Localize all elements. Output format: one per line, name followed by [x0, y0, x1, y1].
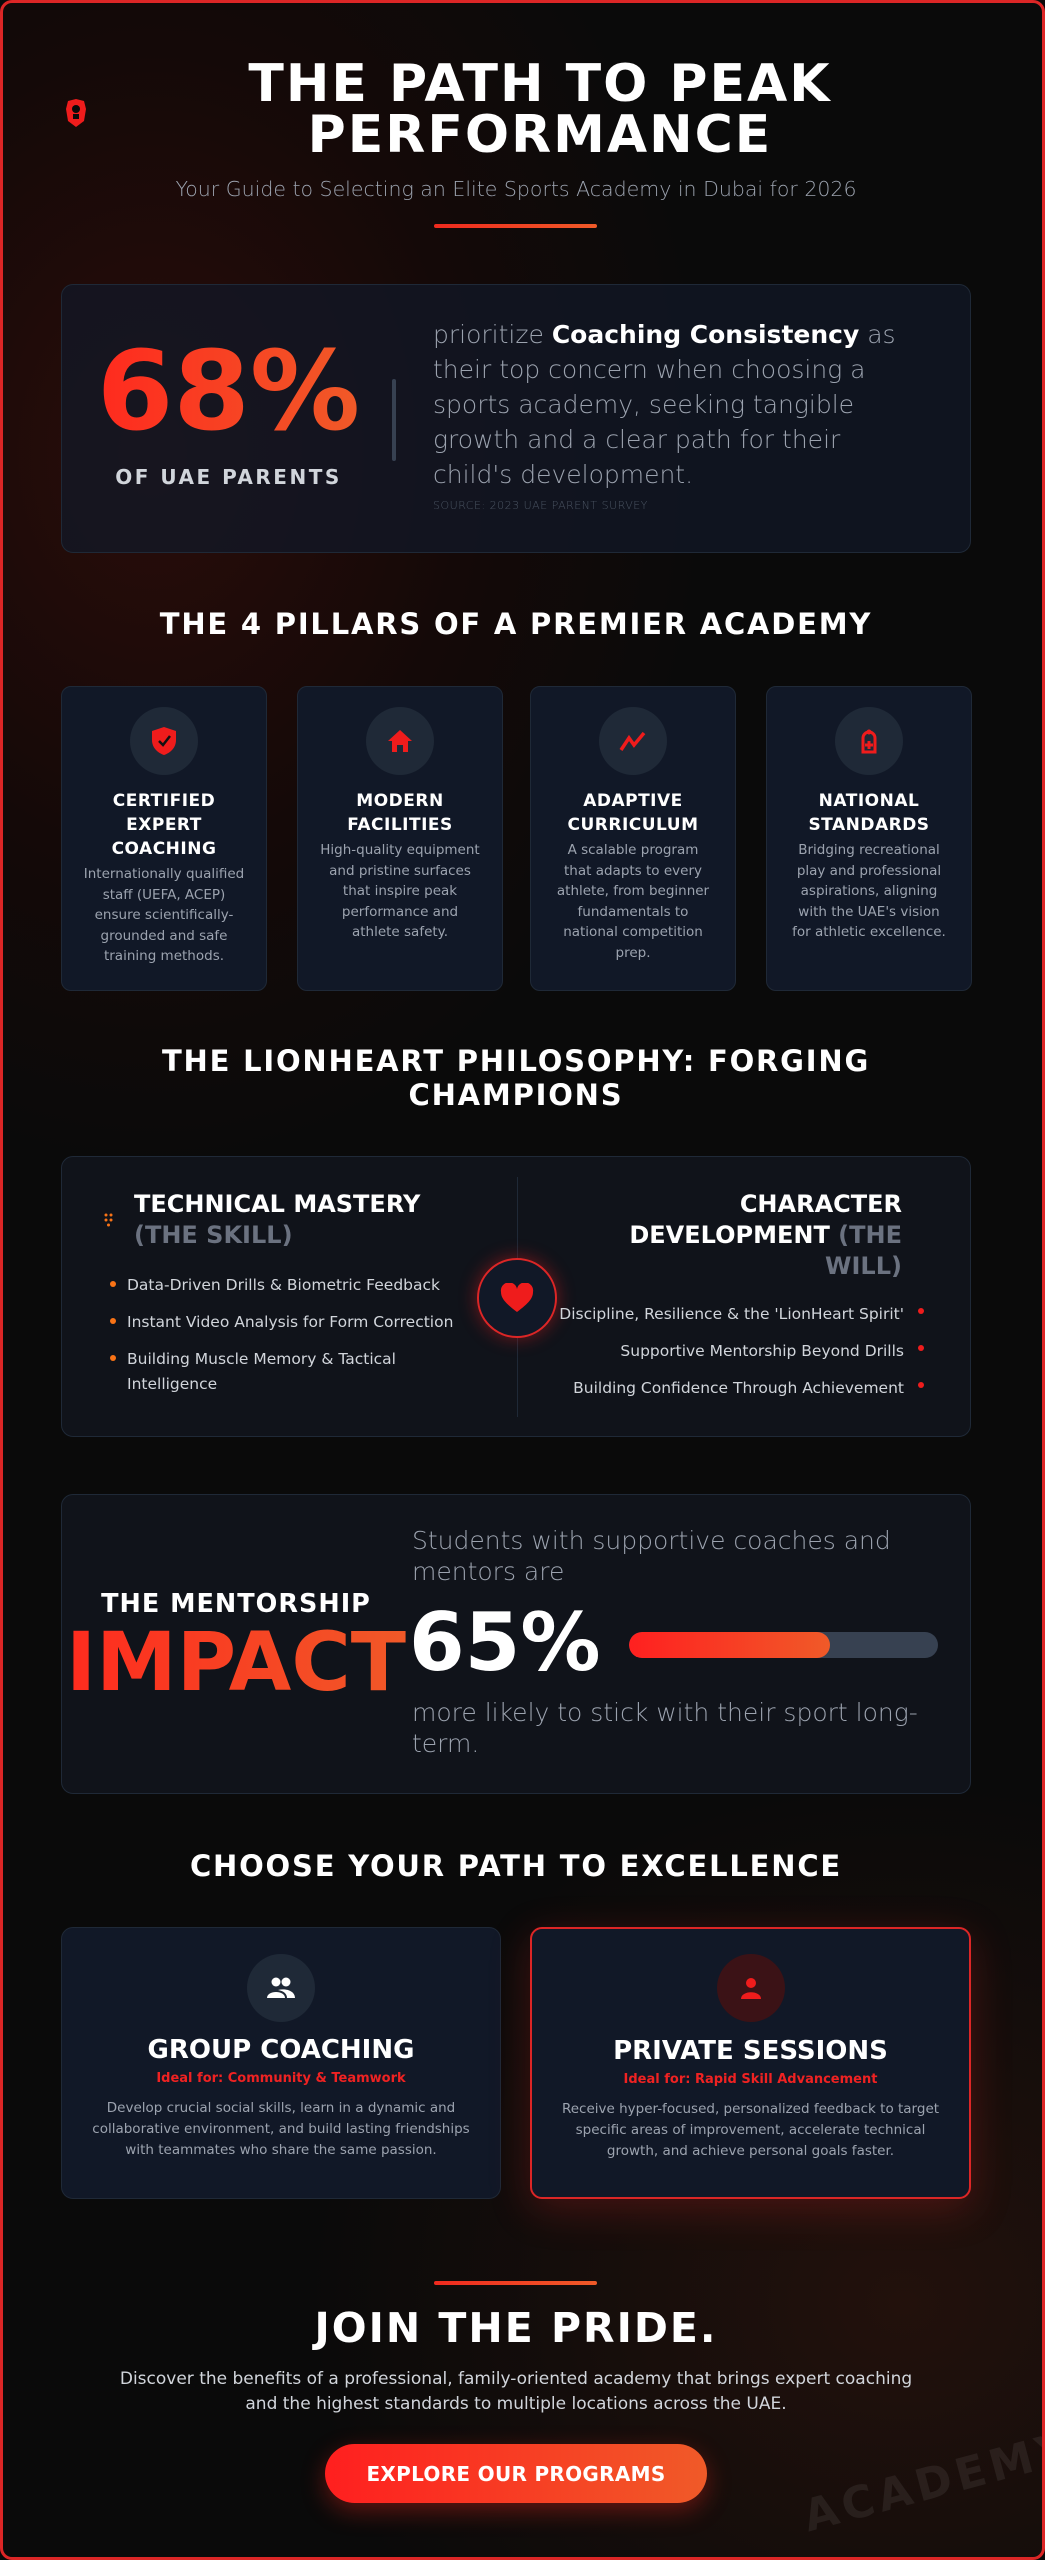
left bullets [110, 1276, 453, 1393]
impact text: Students with supportive coaches and mentors are [412, 1526, 891, 1586]
closing text: Discover the benefits of a professional, family-oriented academy that brings expert coaching and the highest standards to multiple locations across the UAE. [120, 2369, 912, 2414]
pillar: adaptive curriculum [530, 686, 736, 991]
stat 65%: 65% [409, 1596, 600, 1689]
big stat: 68% [97, 327, 360, 455]
pillar: national standards: NATIONAL [819, 791, 919, 811]
logo icon [66, 99, 86, 127]
pillar: certified coaching [61, 686, 267, 991]
subtitle: Your Guide to Selecting an Elite Sports Academy in Dubai for 2026 [175, 177, 857, 201]
card: group coaching [61, 1927, 501, 2199]
left bullets: Instant Video Analysis for Form Correction [127, 1313, 453, 1331]
left title: technical mastery [134, 1190, 421, 1249]
heading: choose path: CHOOSE YOUR PATH TO EXCELLENCE [190, 1849, 842, 1883]
card: group coaching: Develop crucial social skills, learn in a dynamic and collaborative environment, and build lasting friendships with teammates who share the same passion. [92, 2100, 470, 2158]
pillar: certified coaching: Internationally qualified staff (UEFA, ACEP) ensure scientifically-grounded and safe training methods. [84, 866, 244, 964]
card: private sessions: Ideal for: Rapid Skill Advancement [624, 2072, 877, 2087]
heading: philosophy: CHAMPIONS [409, 1078, 623, 1112]
right bullets: Supportive Mentorship Beyond Drills [620, 1342, 904, 1360]
pillar: modern facilities: MODERN [356, 791, 444, 811]
right bullets: Building Confidence Through Achievement [573, 1379, 904, 1397]
right bullets: Discipline, Resilience & the 'LionHeart Spirit' [559, 1305, 904, 1323]
card: private sessions: Receive hyper-focused, personalized feedback to target specific areas of improvement, accelerate technical growth, and achieve personal goals faster. [562, 2101, 939, 2159]
description: prioritize Coaching Consistency as their top concern when choosing a sports academy, seeking tangible growth and a clear path for their child's development. [433, 320, 896, 489]
title: THE PATH TO PEAK [248, 54, 832, 114]
right title: character development [629, 1190, 902, 1280]
pillar: certified coaching: CERTIFIED [113, 791, 215, 811]
heading: join the pride: JOIN THE PRIDE. [314, 2304, 718, 2352]
impact label: THE MENTORSHIP [101, 1589, 371, 1619]
heading: philosophy: THE LIONHEART PHILOSOPHY: FORGING [162, 1044, 870, 1078]
pillar: national standards: STANDARDS [808, 815, 930, 835]
heading: pillars: THE 4 PILLARS OF A PREMIER ACADEMY [160, 607, 872, 641]
pillar: modern facilities: High-quality equipment and pristine surfaces that inspire peak performance and athlete safety. [320, 842, 480, 940]
left title: technical mastery: (THE SKILL) [134, 1221, 293, 1249]
right bullets [559, 1305, 924, 1397]
pillar: certified coaching: COACHING [112, 839, 216, 859]
panel: mentorship impact [61, 1494, 971, 1794]
card: private sessions [530, 1927, 971, 2199]
pillar: national standards: Bridging recreational play and professional aspirations, aligning with the UAE's vision for athletic excellence. [792, 842, 946, 940]
pillar: certified coaching: EXPERT [126, 815, 202, 835]
pillar: adaptive curriculum: CURRICULUM [567, 815, 698, 835]
left title: technical mastery: TECHNICAL MASTERY [134, 1190, 420, 1218]
button: EXPLORE OUR PROGRAMS [366, 2462, 666, 2486]
progress bar [629, 1632, 938, 1658]
right title: character development: DEVELOPMENT (THE [629, 1221, 902, 1249]
icon: heart [477, 1258, 557, 1338]
icon: dots [104, 1214, 112, 1226]
pillar: adaptive curriculum: ADAPTIVE [583, 791, 683, 811]
title [248, 54, 832, 165]
description: SOURCE: 2023 UAE PARENT SURVEY [433, 499, 648, 512]
right title: character development: CHARACTER [740, 1190, 902, 1218]
title: PERFORMANCE [308, 105, 772, 165]
pillar: modern facilities [297, 686, 503, 991]
button [325, 2444, 707, 2503]
panel: philosophy [61, 1156, 971, 1437]
impact text bottom: more likely to stick with their sport long-term. [412, 1698, 918, 1758]
right title: character development: WILL) [825, 1252, 902, 1280]
card: group coaching: GROUP COACHING [148, 2035, 414, 2065]
card: group coaching: Ideal for: Community & Teamwork [156, 2071, 406, 2086]
big stat: OF UAE PARENTS [115, 465, 342, 489]
card: private sessions: PRIVATE SESSIONS [613, 2036, 888, 2066]
heading: philosophy [162, 1044, 870, 1112]
pillar: modern facilities: FACILITIES [347, 815, 453, 835]
pillar: national standards [766, 686, 972, 991]
left bullets: Building Muscle Memory & Tactical Intelligence [127, 1350, 396, 1393]
pillar: adaptive curriculum: A scalable program that adapts to every athlete, from beginner fundamentals to national competition prep. [557, 842, 709, 960]
stat card: 68% [61, 284, 971, 553]
impact label: IMPACT [66, 1616, 406, 1710]
left bullets: Data-Driven Drills & Biometric Feedback [127, 1276, 440, 1294]
